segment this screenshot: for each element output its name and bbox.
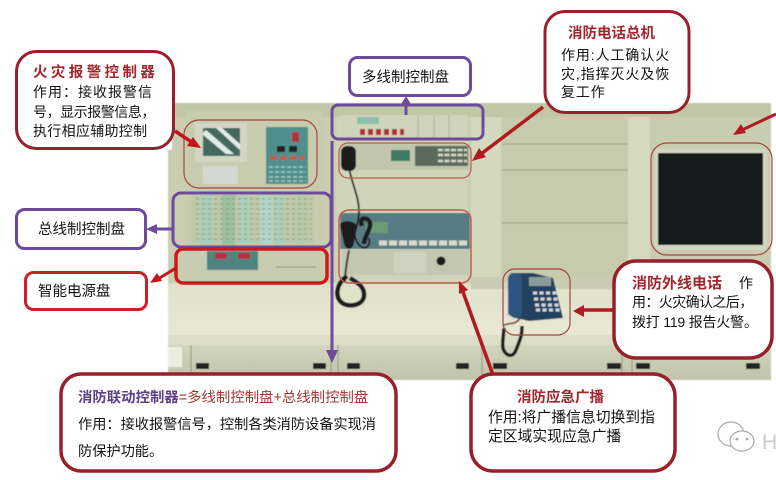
component highlight: monitor [651, 143, 772, 255]
callout description: 作用:人工确认火 [561, 47, 670, 63]
top cornice [172, 103, 771, 117]
callout: smart power panel [26, 272, 146, 310]
callout description: 定区域实现应急广播 [488, 427, 621, 445]
callout title: 火灾报警控制器 [33, 63, 158, 81]
console cabinet body [168, 103, 771, 380]
callout description: 复工作 [561, 84, 606, 100]
arrow: to monitor [733, 114, 776, 135]
callout description: 号，显示报警信息， [33, 104, 155, 120]
arrow: to power label [150, 268, 176, 283]
fire telephone host [340, 144, 470, 170]
callout title: 消防电话总机 [568, 24, 655, 42]
highlight: power panel [176, 249, 327, 283]
callout description: 用：火灾确认之后， [632, 294, 753, 310]
arrow: to alarm controller [175, 131, 201, 148]
callout: fire telephone host [545, 12, 689, 112]
centre bay panel [336, 117, 468, 282]
callout description: 作用：接收报警信 [33, 84, 153, 100]
arrow: to bus panel label [146, 224, 173, 234]
callout description: 执行相应辅助控制 [33, 123, 147, 139]
telephone [503, 273, 563, 355]
component highlight: fire telephone host [339, 143, 471, 178]
arrow: to multi-line label [400, 96, 412, 115]
highlight: bus control panel [173, 193, 331, 247]
desk surface [168, 283, 771, 337]
component highlight: emergency broadcast [339, 210, 471, 283]
bus control panel modules [192, 195, 314, 246]
callout: bus control panel [16, 210, 146, 248]
highlight: multi-line control panel [332, 105, 483, 139]
microphones and coiled cords [337, 146, 370, 305]
callout title: 消防应急广播 [517, 388, 604, 406]
left bay panel [186, 110, 322, 250]
lower cabinet doors [168, 345, 771, 380]
callout title: 消防外线电话 [632, 274, 722, 292]
callout description: 作用：接收报警信号，控制各类消防设备实现消 [78, 417, 376, 433]
callout: emergency broadcast [471, 374, 675, 471]
arrow: to telephone [573, 305, 614, 317]
callout: bus control panel: 总线制控制盘 [38, 220, 125, 238]
component highlight: telephone [503, 269, 570, 335]
fire alarm controller screen [195, 123, 247, 184]
arrow: to telephone host [472, 107, 543, 161]
desk front edge [168, 335, 771, 345]
callout description: 拨打 119 报告火警。 [632, 314, 758, 330]
desk back band [471, 277, 771, 289]
callout description: 作用:将广播信息切换到指 [488, 410, 655, 426]
callout: multi-line control panel [350, 58, 470, 96]
photo: fire control console [168, 103, 771, 380]
callout description: 防保护功能。 [78, 444, 163, 460]
callout: linkage controller [61, 374, 396, 471]
multi-line control panel [340, 115, 468, 139]
component highlight: fire alarm controller [184, 120, 317, 188]
callout title: 消防联动控制器=多线制控制盘+总线制控制盘 [78, 388, 368, 406]
callout: multi-line control panel: 多线制控制盘 [362, 68, 449, 86]
callout description: 灾,指挥灭火及恢 [561, 66, 670, 82]
fire alarm controller keypad [266, 127, 308, 184]
pillars [471, 117, 501, 277]
callout: smart power panel: 智能电源盘 [38, 282, 110, 300]
arrow: linkage controller bracket line [326, 141, 338, 363]
arrow: to emergency broadcast [459, 281, 493, 375]
right bay panel [650, 117, 771, 277]
emergency broadcast unit [340, 213, 470, 275]
callout: fire alarm controller [16, 52, 174, 148]
monitor [655, 149, 767, 250]
power panel [186, 250, 322, 278]
callout description: 作 [739, 275, 753, 291]
callout: external telephone [614, 261, 772, 358]
blank panels bay [502, 117, 628, 277]
icon: wechat watermark [718, 422, 754, 451]
